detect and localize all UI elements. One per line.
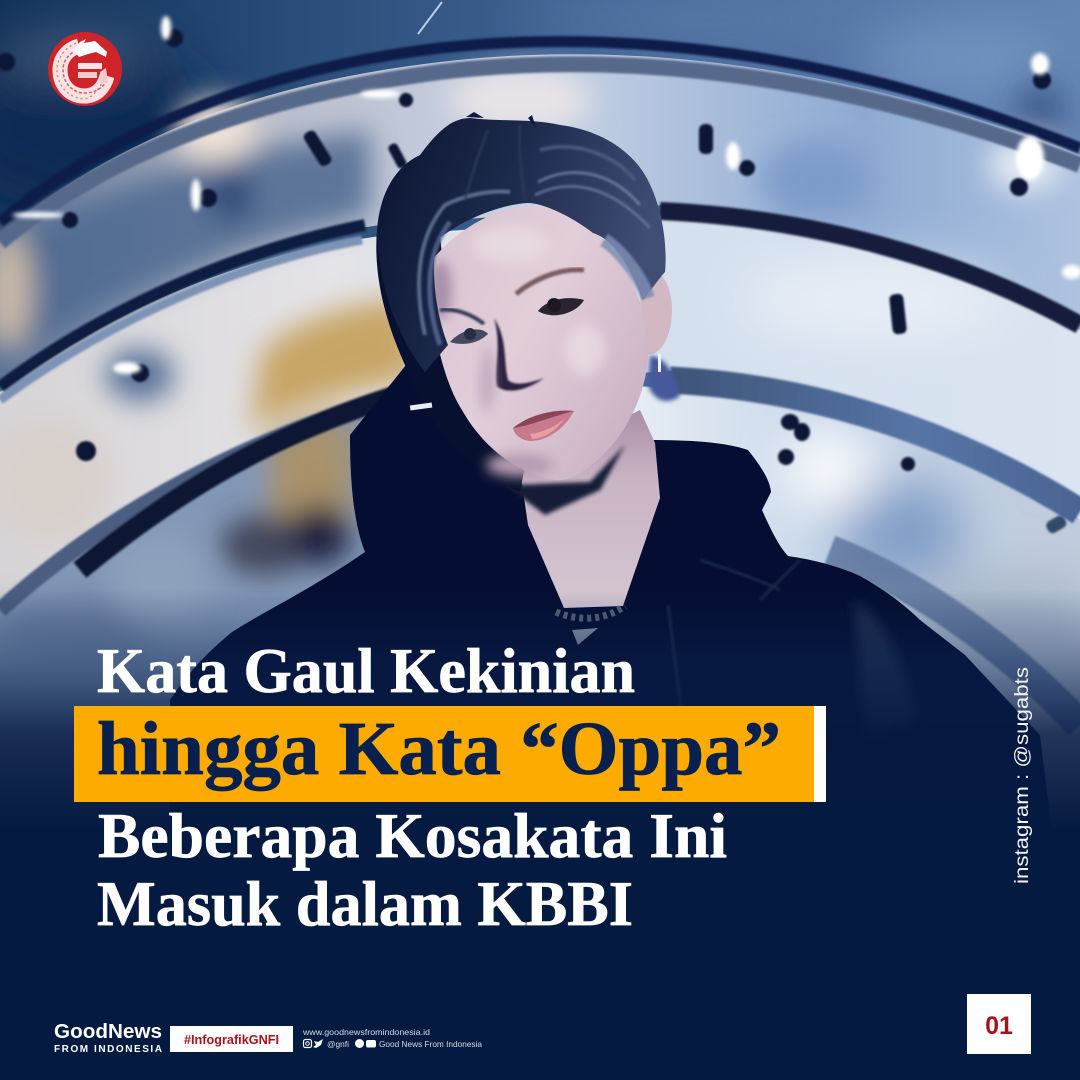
lower right panel <box>620 385 1080 900</box>
hashtag box <box>170 1026 293 1052</box>
page name: Good News From Indonesia <box>379 1039 482 1049</box>
face shading <box>428 227 605 477</box>
title line 2 highlighted: hingga Kata “Oppa” <box>97 707 781 791</box>
necklace <box>556 606 625 618</box>
face <box>430 206 648 480</box>
panel shading and warm reflections <box>0 70 1065 655</box>
GoodNews wordmark: GoodNews <box>54 1021 162 1043</box>
neck <box>520 410 660 608</box>
hashtag box: #InfografikGNFI <box>184 1033 279 1047</box>
footer brand <box>54 1021 482 1055</box>
chin shadow on neck <box>505 445 625 515</box>
lower left panel <box>0 392 420 900</box>
upper steel panel <box>0 54 1080 395</box>
bolts and highlights <box>0 29 1068 535</box>
stripe near jaw <box>410 402 432 411</box>
photo credit: instagram : @sugabts <box>1011 667 1033 884</box>
middle light panel <box>0 215 1080 605</box>
page number: 01 <box>985 1012 1013 1040</box>
title line 4: Masuk dalam KBBI <box>97 869 633 939</box>
jacket sheen <box>855 600 915 735</box>
logo badge: GNFI garuda <box>48 32 122 106</box>
bottom gradient overlay <box>0 590 1080 830</box>
hair <box>377 112 666 372</box>
stray tips <box>466 112 536 128</box>
title line 3: Beberapa Kosakata Ini <box>98 801 727 871</box>
ear and earring <box>638 268 680 401</box>
ring arcs <box>0 42 1080 725</box>
highlight bar <box>74 706 826 802</box>
social icons <box>304 1039 376 1048</box>
hood and jacket <box>170 360 1060 900</box>
lips <box>513 410 574 441</box>
title line 1: Kata Gaul Kekinian <box>97 636 635 706</box>
nose shadow <box>494 318 544 391</box>
top band shading <box>0 0 1060 210</box>
eyebrows <box>516 270 584 294</box>
from indonesia: FROM INDONESIA <box>54 1044 162 1055</box>
person: hoodie, face and hair <box>170 112 1060 900</box>
hair highlights <box>419 125 650 345</box>
title <box>74 636 826 939</box>
website: www.goodnewsfromindonesia.id <box>302 1027 430 1037</box>
page number <box>967 994 1031 1054</box>
metal scratch <box>418 2 442 34</box>
dark side hair and hood shadow <box>376 230 530 492</box>
eyes <box>450 298 584 344</box>
gnfi handle: @gnfi <box>327 1039 349 1049</box>
